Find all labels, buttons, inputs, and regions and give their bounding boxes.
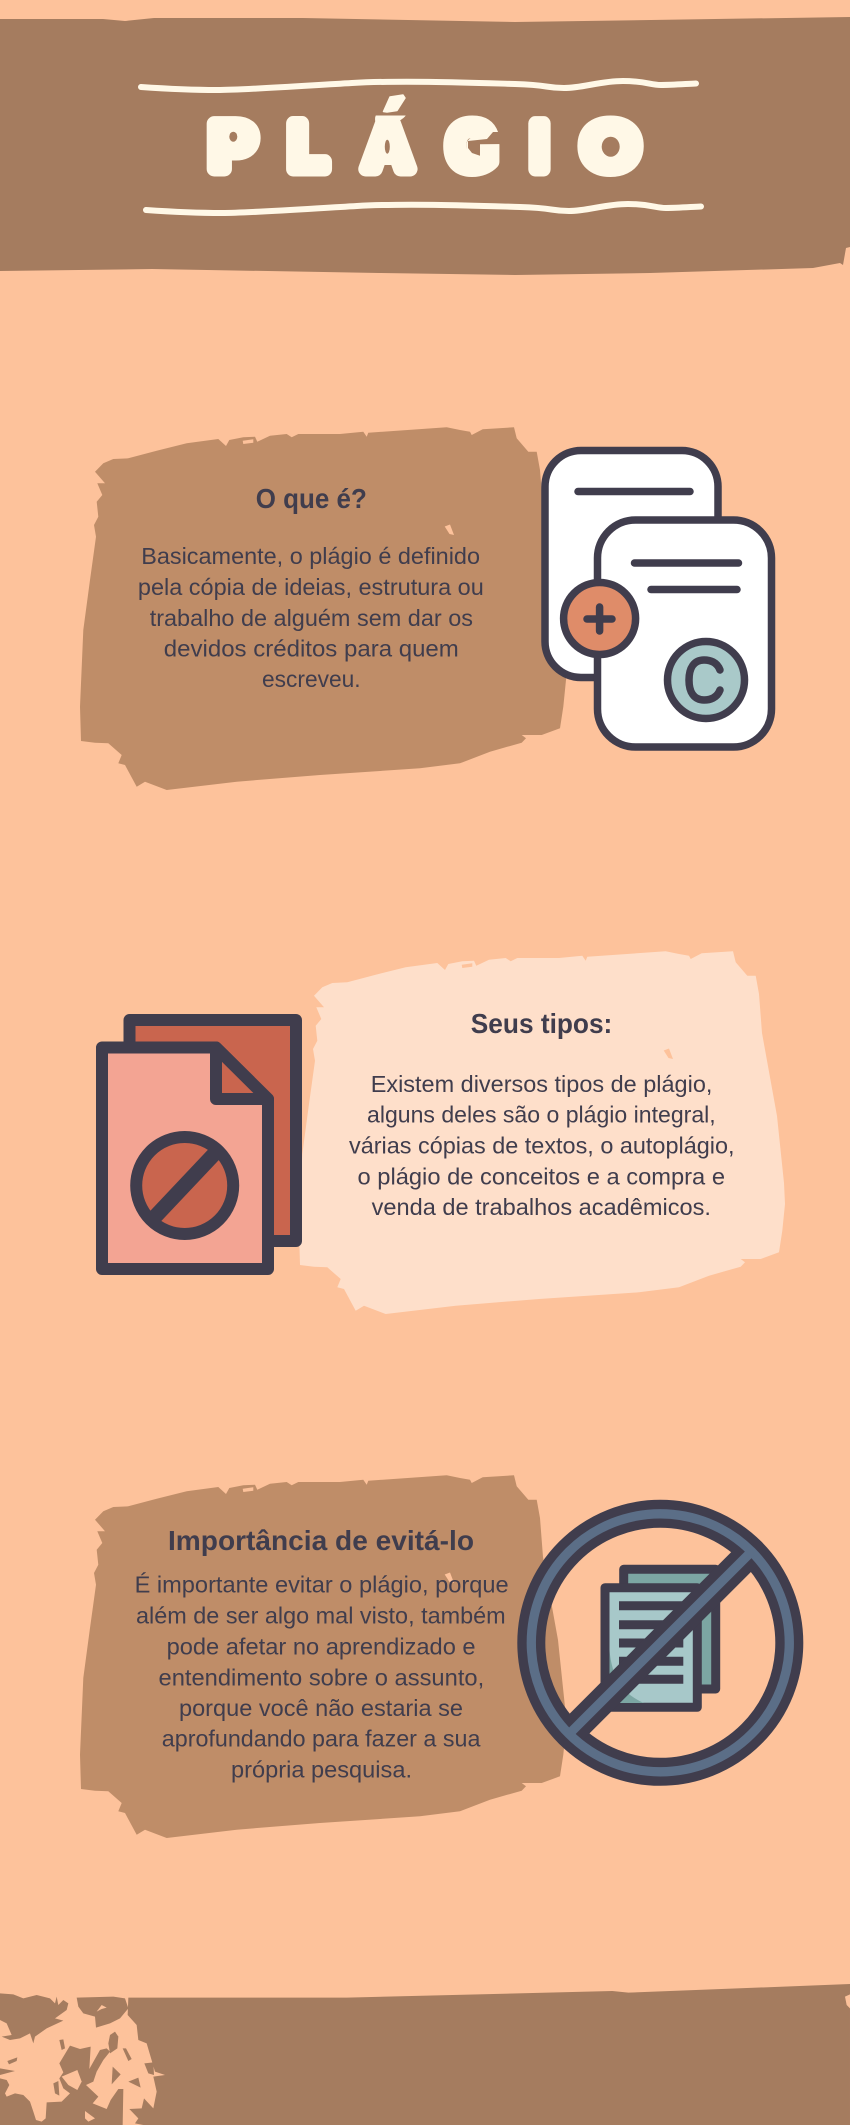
page fold bbox=[216, 1048, 268, 1099]
header bottom line bbox=[146, 204, 701, 213]
back page bbox=[130, 1020, 296, 1241]
back document bbox=[545, 450, 718, 678]
text block: importance: pode afetar no aprendizado e bbox=[167, 1633, 476, 1659]
text block: types: Existem diversos tipos de plágio, bbox=[371, 1071, 712, 1097]
text block: definition: trabalho de alguém sem dar os bbox=[150, 605, 473, 631]
panel 3 shape bbox=[80, 1475, 566, 1838]
panel: o que é bbox=[80, 427, 566, 790]
title: Á bbox=[364, 109, 412, 183]
text block: definition: pela cópia de ideias, estrutura ou bbox=[138, 574, 484, 600]
text block: importance: porque você não estaria se bbox=[179, 1695, 463, 1721]
title: L bbox=[289, 109, 327, 184]
prohibited sign bbox=[136, 1137, 233, 1234]
text block: definition bbox=[138, 543, 484, 692]
copied documents bbox=[605, 1569, 716, 1707]
title: I bbox=[531, 111, 548, 184]
panel: seus tipos bbox=[299, 951, 785, 1314]
plus badge bbox=[564, 582, 636, 654]
title: P bbox=[210, 110, 255, 184]
icon: forbidden file bbox=[102, 1020, 296, 1269]
title: G bbox=[448, 110, 496, 184]
front page bbox=[102, 1048, 268, 1269]
text block: types: várias cópias de textos, o autoplágio, bbox=[349, 1132, 734, 1158]
footer main band bbox=[128, 1984, 850, 2125]
icon: copyright documents bbox=[545, 450, 772, 747]
text block: types: o plágio de conceitos e a compra e bbox=[358, 1163, 725, 1189]
panel 2 shape bbox=[299, 951, 785, 1314]
text block: types bbox=[349, 1071, 734, 1220]
heading: seus tipos: Seus tipos: bbox=[471, 1008, 612, 1039]
text block: definition: devidos créditos para quem bbox=[164, 636, 459, 662]
header band bbox=[0, 17, 850, 275]
icon: no copying bbox=[531, 1514, 789, 1772]
copyright badge bbox=[668, 642, 744, 718]
footer texture bbox=[0, 1993, 850, 2125]
front document bbox=[598, 520, 772, 747]
text block: definition: Basicamente, o plágio é definido bbox=[141, 543, 480, 569]
text block: importance: entendimento sobre o assunto, bbox=[158, 1664, 484, 1690]
prohibition outline bbox=[531, 1514, 789, 1772]
panel 1 shape bbox=[80, 427, 566, 790]
title bbox=[210, 92, 639, 184]
text block: importance: aprofundando para fazer a sua bbox=[162, 1726, 481, 1752]
text block: definition: escreveu. bbox=[262, 666, 361, 692]
panel: importância bbox=[80, 1475, 566, 1838]
heading: importância: Importância de evitá-lo bbox=[168, 1525, 474, 1556]
prohibition fill bbox=[531, 1514, 789, 1772]
text block: importance: É importante evitar o plágio, porque bbox=[135, 1572, 509, 1598]
text block: importance: além de ser algo mal visto, também bbox=[136, 1602, 506, 1628]
title: O bbox=[583, 110, 639, 184]
text block: importance: própria pesquisa. bbox=[231, 1756, 412, 1782]
header top line bbox=[141, 81, 696, 90]
text block: importance bbox=[135, 1572, 509, 1782]
footer band bbox=[0, 1984, 850, 2125]
band shape bbox=[0, 17, 850, 275]
text block: types: venda de trabalhos acadêmicos. bbox=[372, 1194, 711, 1220]
heading: o que é: O que é? bbox=[256, 483, 367, 514]
text block: types: alguns deles são o plágio integral, bbox=[367, 1102, 716, 1128]
